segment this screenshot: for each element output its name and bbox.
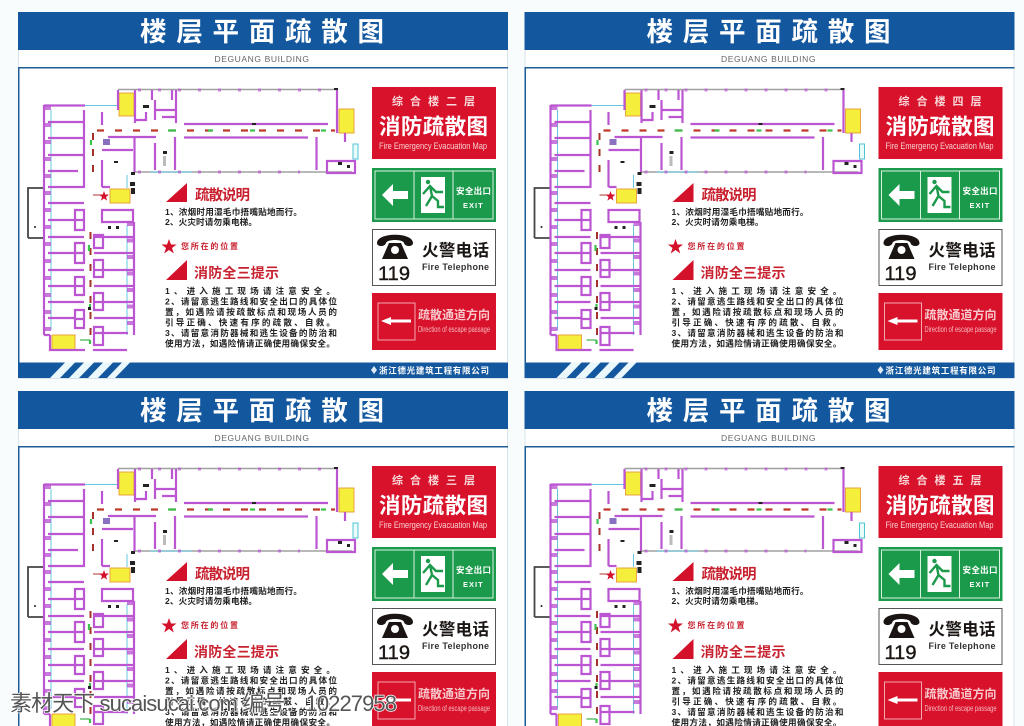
fire telephone sign: 119: [378, 643, 410, 664]
evacuation notes text: 2、火灾时请勿乘电梯。: [165, 216, 257, 227]
green exit sign: 安全出口: [962, 565, 998, 575]
fire safety tips text: [165, 285, 337, 348]
floor plan: [534, 467, 864, 726]
escape direction sign: 疏散通道方向: [924, 307, 996, 322]
fire safety tips text: [672, 285, 844, 348]
green exit sign: [372, 547, 496, 601]
sign panel: fourth floor: [524, 12, 1014, 378]
heading: evacuation notes: [166, 183, 250, 204]
green exit sign: EXIT: [970, 580, 990, 589]
sign panel: third floor: [18, 391, 508, 726]
header bar: [524, 12, 1014, 50]
heading: evacuation notes: 疏散说明: [702, 186, 756, 204]
evacuation notes text: 1、浓烟时用湿毛巾捂嘴贴地而行。: [672, 585, 808, 596]
evacuation notes text: 1、浓烟时用湿毛巾捂嘴贴地而行。: [165, 206, 302, 217]
fire safety tips text: 2、请留意逃生路线和安全出口的具体位: [672, 296, 844, 306]
green exit sign: EXIT: [463, 201, 484, 210]
fire telephone sign: 119: [884, 643, 916, 664]
title: 楼层平面疏散图: [140, 396, 384, 426]
watermark: 素材天下 sucaisucai.com 编号：10227958: [10, 691, 397, 716]
escape direction sign: 疏散通道方向: [418, 307, 490, 322]
fire safety tips text: [165, 664, 337, 726]
heading: evacuation notes: 疏散说明: [195, 565, 250, 583]
evacuation notes text: 1、浓烟时用湿毛巾捂嘴贴地而行。: [165, 585, 302, 596]
red title card: 综合楼二层: [392, 94, 475, 108]
escape direction sign: [878, 672, 1002, 726]
fire telephone sign: [879, 608, 1002, 664]
building name: DEGUANG BUILDING: [721, 54, 816, 64]
fire safety tips text: 2、请留意逃生路线和安全出口的具体位: [165, 296, 337, 306]
fire safety tips text: 1、进入施工现场请注意安全。: [672, 664, 842, 675]
fire safety tips text: 使用方法，如遇险情请正确使用确保安全。: [672, 338, 842, 348]
title: 楼层平面疏散图: [646, 17, 890, 47]
panel frame: [18, 392, 508, 726]
fire safety tips text: 引导正确、快速有序的疏散、自救。: [165, 696, 335, 706]
evacuation notes text: [165, 585, 302, 606]
location star on plan: [99, 570, 109, 580]
header bar: [524, 391, 1014, 429]
fire safety tips text: 置，如遇险请按疏散标点和现场人员的: [672, 685, 844, 696]
fire telephone sign: Fire Telephone: [422, 262, 489, 272]
panel frame: [525, 12, 1014, 378]
panel frame: [525, 392, 1014, 726]
red title card: Fire Emergency Evacuation Map: [379, 520, 487, 531]
fire safety tips text: 3、请留意消防器械和逃生设备的防治和: [672, 706, 844, 717]
fire safety tips text: 引导正确、快速有序的疏散、自救。: [672, 696, 842, 706]
fire telephone sign: [372, 608, 496, 664]
red title card: Fire Emergency Evacuation Map: [886, 520, 994, 531]
green exit sign: [372, 168, 496, 222]
location star on plan: [606, 570, 616, 580]
floor plan: [28, 88, 358, 350]
red title card: [878, 87, 1002, 159]
floor plan: [28, 467, 358, 726]
location star on plan: [99, 191, 109, 201]
you are here legend: 您所在的位置: [688, 241, 744, 251]
building name: DEGUANG BUILDING: [721, 433, 816, 443]
fire safety tips text: 2、请留意逃生路线和安全出口的具体位: [672, 674, 844, 686]
heading: fire safety tips: 消防全三提示: [700, 265, 786, 281]
panel frame: [18, 12, 508, 378]
you are here legend: 您所在的位置: [181, 620, 238, 630]
heading: evacuation notes: [672, 562, 756, 583]
heading: fire safety tips: 消防全三提示: [194, 644, 279, 660]
fire safety tips text: 引导正确、快速有序的疏散、自救。: [165, 316, 335, 328]
sign panel: second floor: [18, 12, 508, 378]
sign panel: fifth floor: [524, 391, 1014, 726]
you are here legend: [668, 239, 744, 254]
green exit sign: 安全出口: [456, 186, 491, 196]
red title card: 综合楼三层: [392, 473, 475, 487]
evacuation notes text: 1、浓烟时用湿毛巾捂嘴贴地而行。: [672, 206, 808, 217]
fire telephone sign: Fire Telephone: [422, 641, 489, 651]
footer bar: [524, 362, 1014, 378]
you are here legend: 您所在的位置: [688, 620, 744, 630]
escape direction sign: [372, 293, 496, 350]
fire safety tips text: 引导正确、快速有序的疏散、自救。: [672, 316, 842, 328]
fire safety tips text: 使用方法，如遇险情请正确使用确保安全。: [165, 338, 335, 348]
fire telephone sign: 火警电话: [422, 620, 489, 639]
heading: fire safety tips: [672, 639, 786, 660]
red title card: Fire Emergency Evacuation Map: [886, 141, 994, 152]
escape direction sign: 疏散通道方向: [418, 686, 490, 701]
heading: fire safety tips: 消防全三提示: [194, 265, 279, 281]
header bar: [18, 391, 508, 429]
escape direction sign: [372, 672, 496, 726]
fire safety tips text: 1、进入施工现场请注意安全。: [165, 285, 335, 296]
escape direction sign: [878, 293, 1002, 350]
fire safety tips text: 1、进入施工现场请注意安全。: [165, 664, 335, 675]
green exit sign: [878, 547, 1002, 601]
heading: fire safety tips: [672, 260, 786, 281]
evacuation notes text: [672, 206, 808, 227]
heading: fire safety tips: [166, 260, 279, 281]
title: 楼层平面疏散图: [140, 17, 384, 47]
red title card: 综合楼四层: [898, 94, 982, 108]
fire telephone sign: [879, 230, 1002, 286]
fire telephone sign: 火警电话: [928, 620, 996, 639]
fire safety tips text: 3、请留意消防器械和逃生设备的防治和: [672, 327, 844, 338]
fire safety tips text: 3、请留意消防器械和逃生设备的防治和: [165, 327, 337, 338]
header bar: [18, 12, 508, 50]
evacuation notes text: 2、火灾时请勿乘电梯。: [165, 595, 257, 606]
evacuation notes text: 2、火灾时请勿乘电梯。: [672, 216, 764, 227]
footer bar: 浙江德光建筑工程有限公司: [379, 366, 489, 376]
building name: DEGUANG BUILDING: [214, 433, 310, 443]
red title card: 消防疏散图: [379, 115, 488, 139]
fire telephone sign: [372, 230, 496, 286]
fire telephone sign: 火警电话: [422, 241, 489, 260]
building name: DEGUANG BUILDING: [214, 54, 310, 64]
escape direction sign: 疏散通道方向: [924, 686, 996, 701]
escape direction sign: Direction of escape passage: [924, 325, 997, 334]
heading: evacuation notes: 疏散说明: [195, 186, 250, 204]
escape direction sign: Direction of escape passage: [418, 704, 490, 713]
red title card: [372, 466, 496, 538]
you are here legend: [162, 239, 238, 254]
heading: evacuation notes: [672, 183, 756, 204]
evacuation notes text: 2、火灾时请勿乘电梯。: [672, 595, 764, 606]
green exit sign: EXIT: [970, 201, 990, 210]
fire safety tips text: 3、请留意消防器械和逃生设备的防治和: [165, 706, 337, 717]
fire telephone sign: 119: [378, 264, 410, 285]
fire telephone sign: Fire Telephone: [928, 641, 996, 651]
fire telephone sign: 火警电话: [928, 241, 996, 260]
red title card: [372, 87, 496, 159]
fire safety tips text: 1、进入施工现场请注意安全。: [672, 285, 842, 296]
red title card: [878, 466, 1002, 538]
footer bar: 浙江德光建筑工程有限公司: [886, 366, 996, 376]
title: 楼层平面疏散图: [646, 396, 890, 426]
heading: fire safety tips: [166, 639, 279, 660]
heading: evacuation notes: [166, 562, 250, 583]
red title card: 消防疏散图: [379, 494, 488, 518]
heading: fire safety tips: 消防全三提示: [700, 644, 786, 660]
fire telephone sign: 119: [884, 264, 916, 285]
red title card: 消防疏散图: [886, 494, 994, 518]
red title card: 综合楼五层: [898, 473, 982, 487]
green exit sign: [878, 168, 1002, 222]
fire safety tips text: 置，如遇险请按疏散标点和现场人员的: [165, 685, 337, 696]
green exit sign: EXIT: [463, 580, 484, 589]
red title card: Fire Emergency Evacuation Map: [379, 141, 487, 152]
you are here legend: [668, 618, 744, 632]
evacuation notes text: [165, 206, 302, 227]
escape direction sign: Direction of escape passage: [924, 704, 997, 713]
escape direction sign: Direction of escape passage: [418, 325, 490, 334]
evacuation notes text: [672, 585, 808, 606]
location star on plan: [606, 191, 616, 201]
fire safety tips text: 置，如遇险请按疏散标点和现场人员的: [672, 306, 844, 317]
you are here legend: [162, 618, 238, 632]
fire safety tips text: 2、请留意逃生路线和安全出口的具体位: [165, 674, 337, 686]
fire safety tips text: [672, 664, 844, 726]
floor plan: [534, 88, 864, 350]
fire telephone sign: Fire Telephone: [928, 262, 996, 272]
fire safety tips text: 置，如遇险请按疏散标点和现场人员的: [165, 306, 337, 317]
heading: evacuation notes: 疏散说明: [702, 565, 756, 583]
green exit sign: 安全出口: [456, 565, 491, 575]
red title card: 消防疏散图: [886, 115, 994, 139]
you are here legend: 您所在的位置: [181, 241, 238, 251]
footer bar: [18, 362, 508, 378]
green exit sign: 安全出口: [962, 186, 998, 196]
